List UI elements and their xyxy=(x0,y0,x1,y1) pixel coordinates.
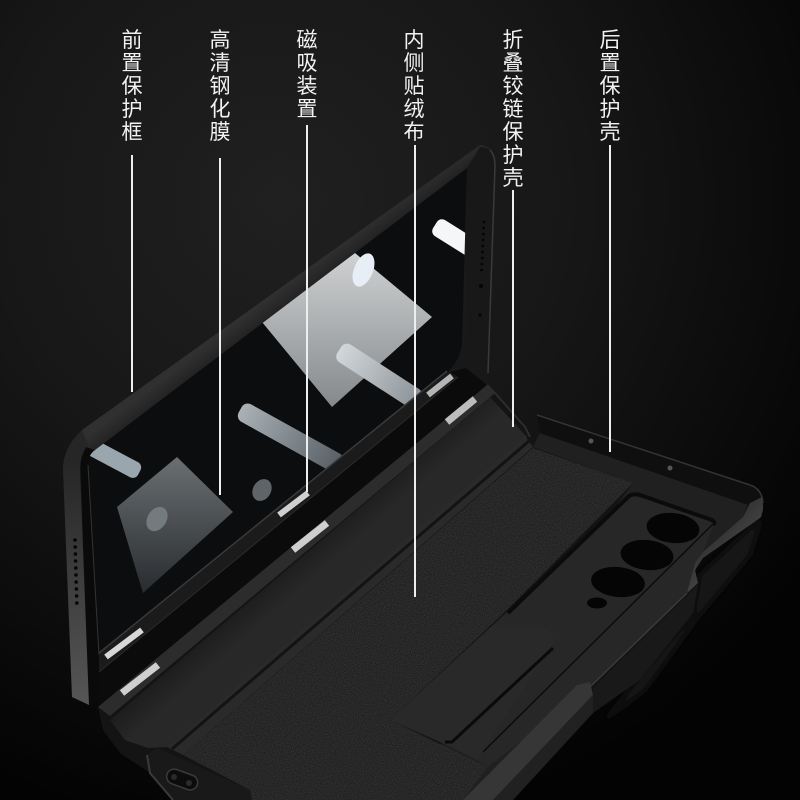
right lit edge upper xyxy=(687,497,763,593)
front hinge strip xyxy=(99,371,458,672)
bottom button xyxy=(165,767,200,792)
label: tempered film: 膜 xyxy=(210,121,230,144)
label: velvet: 绒 xyxy=(404,98,424,121)
tempered glass film xyxy=(74,168,482,655)
label: velvet: 侧 xyxy=(404,52,424,75)
magnet bar 6 xyxy=(447,399,475,422)
label: rear shell: 后 xyxy=(600,29,620,52)
upper left pill reflection xyxy=(90,444,142,478)
right lit edge lower xyxy=(463,682,593,800)
lower trapezoid reflection xyxy=(117,457,233,593)
label: hinge cover: 护 xyxy=(502,144,524,167)
frame right speaker holes xyxy=(478,221,485,317)
inner shell surface xyxy=(440,433,748,800)
upper pill reflection xyxy=(336,344,421,404)
hinge end cap xyxy=(487,385,530,437)
upper ellipse reflection xyxy=(352,253,374,287)
label: front frame: 置 xyxy=(122,52,142,75)
camera hole 1 xyxy=(645,510,701,546)
label: front frame: 保 xyxy=(122,75,142,98)
frame top band xyxy=(63,145,495,470)
plate top groove xyxy=(508,494,714,613)
plate right groove xyxy=(483,524,713,752)
magnet bar 4 xyxy=(122,665,158,693)
label: front frame: 护 xyxy=(122,98,142,121)
lower ellipse reflection xyxy=(146,507,168,532)
label: velvet: 布 xyxy=(404,121,424,144)
label: tempered film: 钢 xyxy=(210,75,230,98)
label: hinge cover: 折 xyxy=(502,29,524,52)
label: hinge cover: 叠 xyxy=(502,52,524,75)
hinge ridge groove xyxy=(172,441,529,749)
top rim xyxy=(537,415,762,505)
front protective frame xyxy=(63,145,495,705)
magnet bar 3 xyxy=(428,376,452,395)
magnet bar 1 xyxy=(106,630,142,657)
label: magnet: 置 xyxy=(296,98,318,121)
camera hole 3 xyxy=(590,564,646,600)
rear shell xyxy=(98,385,763,800)
flash hole xyxy=(587,598,607,608)
kickstand groove xyxy=(445,648,553,742)
right rim line xyxy=(590,593,687,687)
white pill reflection xyxy=(432,219,466,255)
label: front frame: 框 xyxy=(122,121,142,144)
label: rear shell xyxy=(600,29,620,452)
kickstand xyxy=(390,625,555,760)
glass pane xyxy=(88,168,467,655)
floor reflection xyxy=(600,517,762,725)
label: rear shell: 保 xyxy=(600,75,620,98)
frame right bar edge xyxy=(488,150,495,373)
hinge trough xyxy=(110,397,527,748)
camera hole 2 xyxy=(619,537,675,573)
label: tempered film: 清 xyxy=(210,52,230,75)
label: velvet xyxy=(404,29,424,597)
gap between panels xyxy=(98,368,487,707)
right side strip lower xyxy=(493,695,593,800)
upper square reflection xyxy=(262,253,432,407)
inner velvet fabric xyxy=(180,440,640,800)
label: hinge cover: 链 xyxy=(502,98,524,121)
right dark side xyxy=(593,585,698,713)
label: tempered film: 化 xyxy=(210,98,230,121)
frame left bar xyxy=(63,430,89,705)
label: tempered film xyxy=(210,29,230,495)
label: hinge cover: 铰 xyxy=(502,75,524,98)
rim dots xyxy=(588,438,594,444)
frame left speaker holes xyxy=(73,538,79,605)
label: front frame xyxy=(122,29,142,392)
lower long pill reflection xyxy=(238,404,342,468)
hinge ridge xyxy=(167,436,533,755)
label: velvet: 内 xyxy=(404,29,424,52)
label: hinge cover: 壳 xyxy=(502,167,524,190)
label: velvet: 贴 xyxy=(404,75,424,98)
label: tempered film: 高 xyxy=(210,29,230,52)
label: hinge cover: 保 xyxy=(502,121,524,144)
label: rear shell: 壳 xyxy=(600,121,620,144)
label: rear shell: 护 xyxy=(600,98,620,121)
rear plate xyxy=(390,494,714,767)
magnet bar 5 xyxy=(293,523,327,550)
label: hinge cover xyxy=(502,29,524,427)
label: front frame: 前 xyxy=(122,29,142,52)
label: rear shell: 置 xyxy=(600,52,620,75)
label: magnet: 装 xyxy=(296,75,318,98)
label: magnet: 磁 xyxy=(296,29,318,52)
folding hinge top edge xyxy=(98,385,495,716)
left glass edge xyxy=(88,465,99,655)
magnet bar 2 xyxy=(279,493,308,515)
small ellipse reflection xyxy=(252,479,272,501)
shell body xyxy=(98,385,762,800)
label: magnet xyxy=(296,29,318,492)
bottom cap xyxy=(147,748,252,800)
label: magnet: 吸 xyxy=(296,52,318,75)
frame right bar xyxy=(466,147,495,373)
frame left dark inner xyxy=(80,445,99,705)
